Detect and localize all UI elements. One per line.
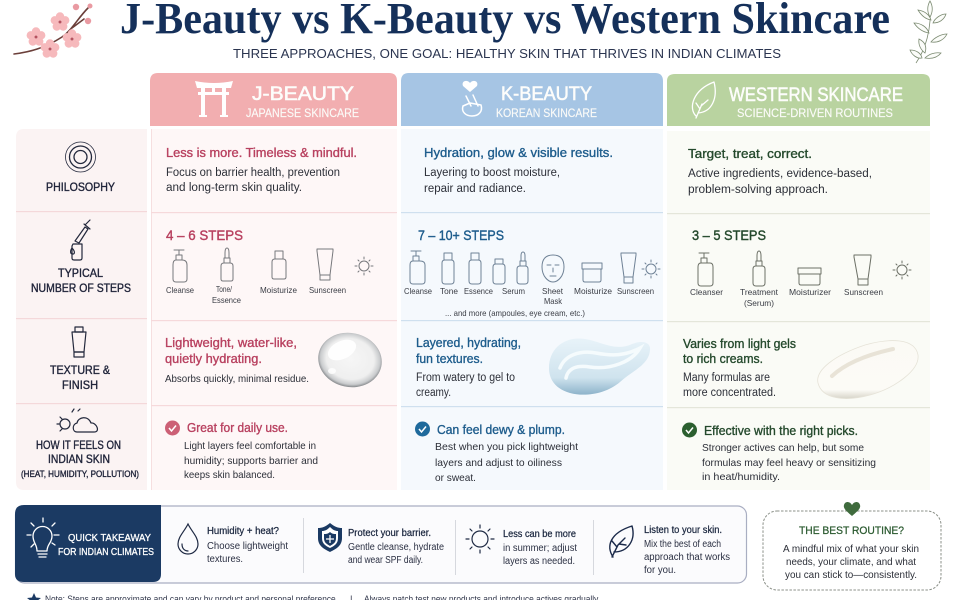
column header: Western Skincare: SCIENCE-DRIVEN ROUTINES	[737, 108, 893, 120]
icon: serum bottle	[221, 248, 233, 281]
J-Beauty steps: Tone/	[216, 284, 232, 294]
column header: J-Beauty: J-BEAUTY	[252, 84, 354, 105]
icon: jar	[582, 263, 602, 282]
icon: tube	[72, 327, 86, 357]
K-Beauty philosophy text: Hydration, glow & visible results.	[424, 145, 613, 160]
icon: water drop	[178, 524, 198, 554]
J-Beauty steps	[166, 227, 373, 305]
takeaway: barrier: and wear SPF daily.	[348, 555, 423, 566]
icon: check badge	[682, 422, 697, 438]
K-Beauty feel	[415, 422, 578, 484]
J-Beauty steps: Cleanse	[166, 285, 194, 295]
K-Beauty steps: Mask	[544, 296, 563, 306]
takeaway: less can be more: layers as needed.	[503, 556, 575, 567]
icon: tube	[854, 255, 871, 285]
Western steps: Moisturizer	[789, 287, 831, 297]
icon: sun	[893, 261, 911, 279]
takeaway: listen to your skin	[644, 525, 730, 576]
icon: sun	[355, 257, 373, 275]
J-Beauty feel: humidity; supports barrier and	[184, 455, 318, 467]
row label: philosophy	[46, 142, 115, 194]
J-Beauty steps: 4 – 6 STEPS	[166, 227, 243, 243]
callout: the best routine: needs, your climate, and what	[786, 556, 916, 568]
icon: leaf outline	[692, 82, 715, 118]
J-Beauty feel	[165, 420, 318, 481]
icon: serum bottle	[517, 252, 528, 284]
K-Beauty steps: Sunscreen	[617, 286, 654, 296]
J-Beauty philosophy text: Less is more. Timeless & mindful.	[166, 145, 357, 160]
icon: star	[27, 593, 41, 600]
Western philosophy text	[688, 146, 872, 196]
icon: serum bottle	[753, 251, 765, 286]
row label: typical number of steps: TYPICAL	[58, 268, 104, 280]
row label: how it feels on Indian skin: INDIAN SKIN	[48, 454, 110, 466]
K-Beauty steps	[404, 227, 660, 318]
panel: J-Beauty column background	[151, 129, 397, 490]
icon: small bottle	[493, 259, 505, 284]
takeaway: barrier: Gentle cleanse, hydrate	[348, 542, 444, 553]
K-Beauty texture	[416, 335, 650, 399]
takeaway: humidity: Humidity + heat?	[207, 526, 279, 537]
callout: the best routine: THE BEST ROUTINE?	[799, 525, 904, 537]
column header: K-Beauty: K-BEAUTY	[501, 84, 592, 105]
K-Beauty steps: 7 – 10+ STEPS	[418, 227, 504, 243]
K-Beauty steps: Essence	[464, 286, 493, 296]
takeaway: listen to your skin: Listen to your skin.	[644, 525, 722, 536]
K-Beauty philosophy text: repair and radiance.	[424, 183, 526, 195]
Western philosophy text: Active ingredients, evidence-based,	[688, 168, 872, 180]
K-Beauty steps: Sheet	[542, 286, 564, 296]
panel: Western column background	[667, 131, 930, 490]
Western steps	[690, 227, 911, 308]
icon: leaf	[610, 526, 633, 557]
row label: typical number of steps: NUMBER OF STEPS	[31, 283, 131, 295]
icon: finger heart	[463, 81, 482, 116]
K-Beauty philosophy text: Layering to boost moisture,	[424, 167, 560, 179]
subtitle: THREE APPROACHES, ONE GOAL: HEALTHY SKIN THAT THRIVES IN INDIAN CLIMATES	[233, 46, 781, 61]
column header: J-Beauty	[150, 73, 397, 126]
icon: shield	[318, 523, 342, 552]
takeaway: barrier	[348, 528, 444, 566]
callout: the best routine: A mindful mix of what your skin	[783, 543, 919, 555]
K-Beauty texture: From watery to gel to	[416, 372, 515, 384]
panel: quick takeaway	[15, 505, 746, 583]
quick takeaway badge: QUICK TAKEAWAY	[68, 532, 151, 544]
row label: how it feels on Indian skin: HOW IT FEELS ON	[36, 440, 121, 452]
row label: philosophy: PHILOSOPHY	[46, 182, 115, 194]
takeaway: barrier: Protect your barrier.	[348, 528, 431, 539]
K-Beauty feel: or sweat.	[435, 472, 476, 484]
K-Beauty steps: Tone	[440, 286, 458, 296]
icon: torii gate	[195, 81, 233, 117]
J-Beauty philosophy text	[166, 145, 357, 194]
icon: check badge	[415, 422, 430, 436]
J-Beauty texture: quietly hydrating.	[165, 351, 262, 366]
panel: K-Beauty column background	[401, 129, 663, 490]
K-Beauty feel: Can feel dewy & plump.	[437, 422, 565, 437]
callout: the best routine	[763, 502, 941, 590]
takeaway: less can be more: Less can be more	[503, 529, 576, 540]
icon: bottle	[469, 253, 481, 284]
column header: K-Beauty: KOREAN SKINCARE	[496, 108, 597, 120]
K-Beauty steps: Serum	[502, 286, 525, 296]
K-Beauty steps: Moisturize	[574, 286, 612, 296]
icon: sun and cloud	[57, 409, 97, 432]
J-Beauty feel: Light layers feel comfortable in	[184, 440, 316, 452]
J-Beauty feel: keeps skin balanced.	[184, 469, 275, 481]
J-Beauty philosophy text: Focus on barrier health, prevention	[166, 167, 340, 179]
Western feel: Stronger actives can help, but some	[702, 442, 864, 454]
J-Beauty philosophy text: and long-term skin quality.	[166, 182, 302, 194]
icon: check badge	[165, 420, 180, 436]
footnote	[27, 593, 600, 600]
K-Beauty philosophy text	[424, 145, 613, 195]
icon: pump bottle	[698, 253, 713, 286]
J-Beauty feel: Great for daily use.	[187, 420, 288, 435]
row label: texture and finish: TEXTURE &	[50, 365, 110, 377]
K-Beauty steps: ... and more (ampoules, eye cream, etc.)	[445, 308, 585, 318]
Western texture: to rich creams.	[683, 351, 763, 366]
takeaway: listen to your skin: approach that works	[644, 552, 730, 563]
Western feel	[682, 422, 876, 483]
takeaway: humidity: textures.	[207, 554, 243, 565]
row label: how it feels on Indian skin	[21, 409, 139, 479]
column header: K-Beauty	[401, 73, 663, 126]
takeaway: humidity: Choose lightweight	[207, 541, 288, 552]
texture: cream swatch	[818, 341, 918, 399]
Western steps: 3 – 5 STEPS	[692, 227, 766, 243]
takeaway: listen to your skin: Mix the best of each	[644, 539, 721, 550]
J-Beauty steps: Moisturize	[260, 285, 297, 295]
Western steps: Cleanser	[690, 287, 723, 297]
row label: how it feels on Indian skin: (HEAT, HUMIDITY, POLLUTION)	[21, 469, 139, 479]
icon: pump bottle	[410, 251, 425, 284]
K-Beauty steps: Cleanse	[404, 286, 432, 296]
column header: Western Skincare: WESTERN SKINCARE	[729, 85, 903, 106]
icon: concentric circles	[66, 142, 96, 172]
J-Beauty texture: Absorbs quickly, minimal residue.	[165, 373, 309, 385]
Western texture	[683, 336, 918, 399]
Western texture: Many formulas are	[683, 372, 770, 384]
K-Beauty feel: Best when you pick lightweight	[435, 441, 578, 453]
Western feel: in heat/humidity.	[702, 471, 780, 483]
J-Beauty texture: Lightweight, water-like,	[165, 335, 297, 350]
row label: texture and finish: FINISH	[62, 380, 98, 392]
Western steps: Treatment	[740, 287, 779, 297]
K-Beauty feel: layers and adjust to oiliness	[435, 457, 562, 469]
column header: J-Beauty: JAPANESE SKINCARE	[246, 108, 359, 120]
icon: sun	[466, 525, 494, 553]
decoration: cherry blossom branch	[14, 4, 92, 58]
J-Beauty steps: Essence	[212, 295, 241, 305]
K-Beauty texture: creamy.	[416, 387, 451, 399]
K-Beauty texture: Layered, hydrating,	[416, 335, 521, 350]
icon: pump bottle	[173, 250, 187, 282]
icon: sun	[642, 260, 660, 278]
takeaway: less can be more: in summer; adjust	[503, 543, 577, 554]
quick takeaway badge: FOR INDIAN CLIMATES	[58, 546, 154, 558]
J-Beauty steps: Sunscreen	[309, 285, 346, 295]
Western feel: Effective with the right picks.	[704, 423, 858, 438]
texture: gel swatch	[549, 339, 650, 395]
quick takeaway badge	[15, 505, 161, 582]
Western feel: formulas may feel heavy or sensitizing	[702, 457, 876, 469]
K-Beauty texture: fun textures.	[416, 351, 483, 366]
row label: typical number of steps	[31, 220, 131, 295]
column header: Western Skincare	[667, 74, 930, 126]
Western steps: Sunscreen	[844, 287, 883, 297]
takeaway: listen to your skin: for you.	[644, 565, 676, 576]
icon: dropper bottle	[71, 220, 90, 260]
texture: water droplet	[313, 327, 387, 393]
decoration: leaf sprig	[910, 1, 947, 63]
icon: tube	[317, 249, 333, 280]
icon: lightbulb	[27, 518, 59, 557]
J-Beauty texture	[165, 327, 387, 393]
Western texture: more concentrated.	[683, 387, 776, 399]
takeaway: less can be more	[503, 529, 577, 567]
icon: jar	[798, 268, 821, 285]
icon: heart	[844, 502, 860, 516]
takeaway: humidity	[207, 526, 288, 565]
callout: the best routine: you can stick to—consistently.	[785, 569, 917, 581]
Western philosophy text: problem-solving approach.	[688, 184, 828, 196]
row label: texture and finish	[50, 327, 110, 392]
Western steps: (Serum)	[744, 298, 774, 308]
icon: bottle	[272, 251, 286, 279]
Western texture: Varies from light gels	[683, 336, 796, 351]
row labels panel	[16, 129, 147, 490]
Western philosophy text: Target, treat, correct.	[688, 146, 812, 161]
icon: sheet mask	[542, 255, 564, 282]
icon: tube	[621, 253, 636, 283]
icon: bottle	[442, 253, 454, 284]
